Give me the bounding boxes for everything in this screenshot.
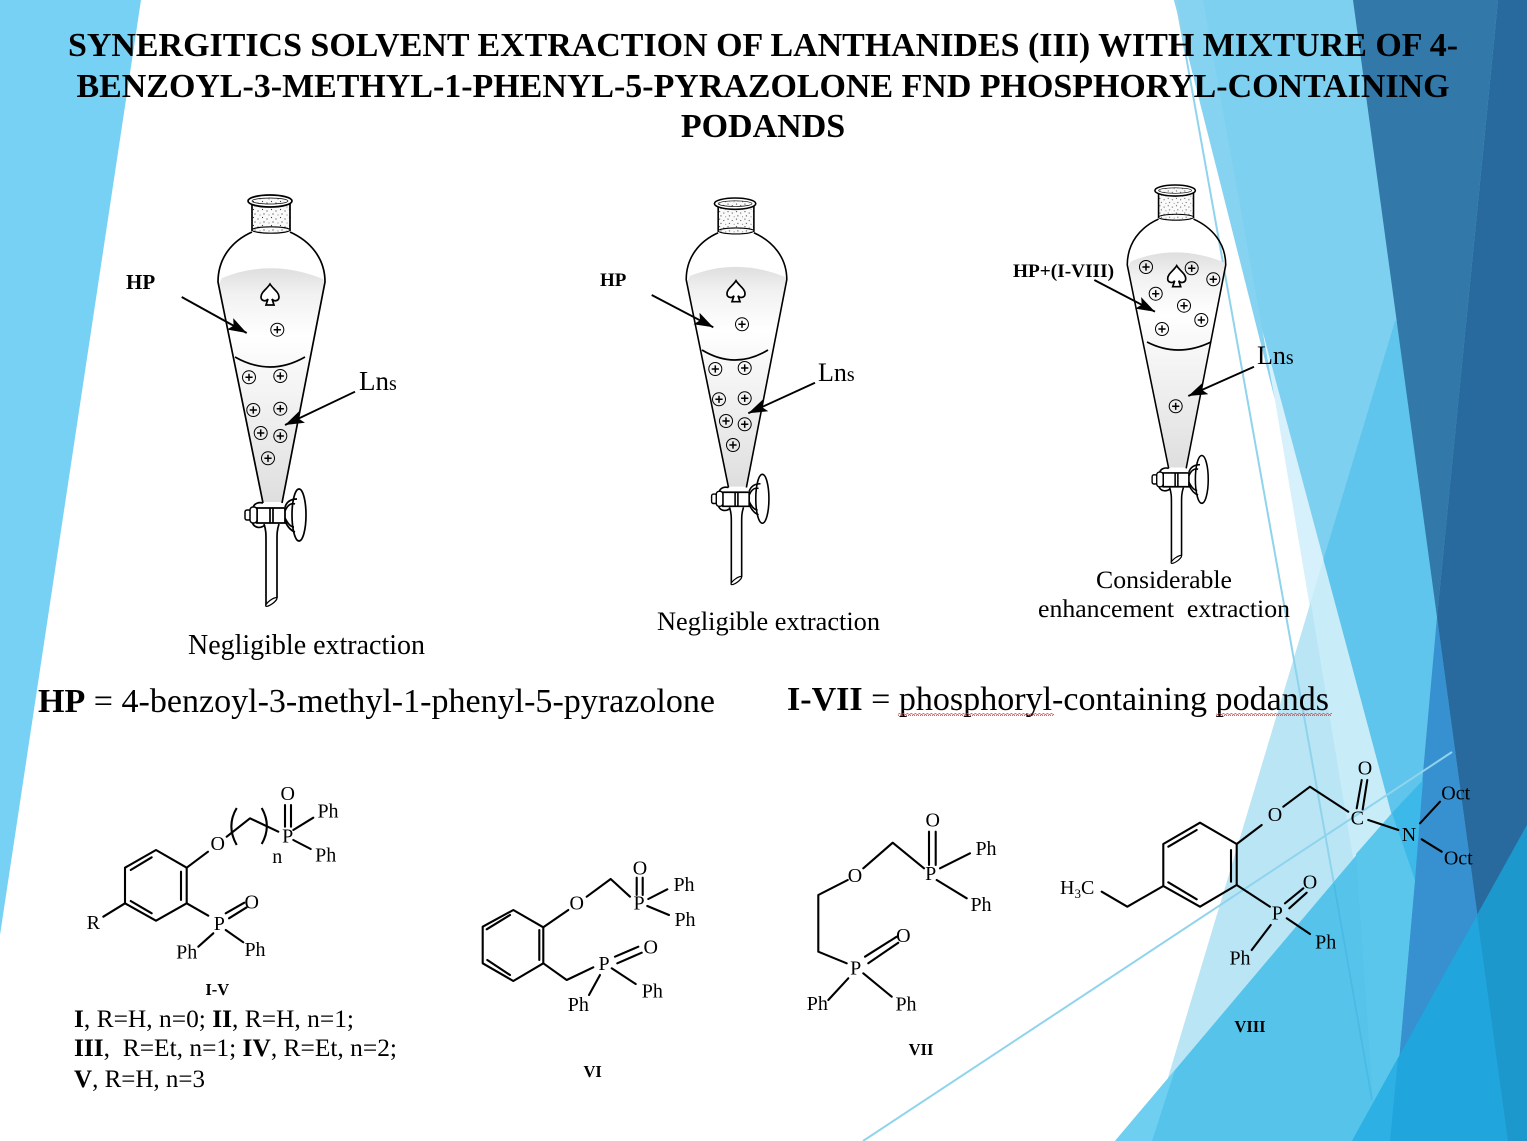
title: SYNERGITICS SOLVENT EXTRACTION OF LANTHANIDES (III) WITH MIXTURE OF 4- (68, 27, 1458, 64)
structure: compound VIII: VIII (1234, 1017, 1266, 1036)
structure: compound VI: O (569, 892, 584, 914)
structure: compound VII: O (848, 865, 862, 887)
structure: compound VIII: C (1081, 877, 1094, 899)
structure: compound VII: O (925, 810, 940, 832)
structure: compound VIII (1060, 757, 1473, 1036)
structure: compound VIII: Oct (1444, 847, 1473, 869)
structure: compound VI (483, 857, 696, 1081)
structure: compound VII: Ph (807, 993, 828, 1015)
structure: compound VI: P (633, 892, 645, 914)
structure: compounds I-V: n (272, 846, 282, 868)
panel: flask 2 (600, 198, 880, 636)
structure: compounds I-V: Ph (315, 845, 336, 867)
structure: compound VII: O (896, 925, 911, 947)
text: compound legend (74, 1006, 397, 1093)
structure: compound VIII: P (1272, 902, 1283, 924)
panel: flask 1: Lns (359, 366, 397, 396)
structure: compounds I-V: I-V (205, 980, 229, 999)
structure: compound VIII: Oct (1441, 782, 1471, 804)
panel: flask 1: Negligible extraction (188, 630, 425, 661)
structure: compound VIII: O (1358, 757, 1372, 779)
structure: compound VIII: N (1402, 824, 1416, 846)
structure: compound VI: Ph (673, 874, 695, 896)
structure: compounds I-V: P (282, 826, 293, 848)
text: compound legend: I, R=H, n=0; II, R=H, n=1; (74, 1006, 354, 1033)
structure: compound VIII: H (1060, 877, 1074, 899)
definition: HP: HP = 4-benzoyl-3-methyl-1-phenyl-5-pyrazolone (38, 683, 715, 720)
structure: compound VI: Ph (642, 981, 663, 1003)
panel: flask 2: Negligible extraction (657, 607, 880, 636)
structure: compound VI: VI (584, 1062, 602, 1081)
text: compound legend: III, R=Et, n=1; IV, R=Et, n=2; (74, 1035, 397, 1062)
panel: flask 2: HP (600, 270, 627, 291)
structure: compound VII: Ph (970, 894, 992, 916)
structure: compound VII: Ph (895, 994, 917, 1016)
structure: compound VII: VII (909, 1040, 933, 1059)
structure: compound VI: O (633, 857, 647, 879)
structure: compounds I-V: R (87, 912, 101, 934)
structure: compound VI: Ph (568, 994, 589, 1016)
structure: compound VIII: O (1268, 804, 1282, 826)
structure: compound VII: Ph (975, 838, 997, 860)
panel: flask 3: enhancement extraction (1038, 594, 1290, 623)
structure: compound VIII: C (1351, 807, 1364, 829)
title: BENZOYL-3-METHYL-1-PHENYL-5-PYRAZOLONE FND PHOSPHORYL-CONTAINING (76, 68, 1450, 105)
panel: flask 3: Considerable (1096, 565, 1232, 594)
structure: compounds I-V (87, 783, 339, 999)
panel: flask 1 (126, 195, 425, 661)
panel: flask 1: HP (126, 270, 155, 294)
definition: podands: I-VII = phosphoryl-containing podands (787, 681, 1329, 718)
panel: flask 3: HP+(I-VIII) (1013, 262, 1114, 282)
text: compound legend: V, R=H, n=3 (74, 1066, 205, 1093)
structure: compounds I-V: P (214, 913, 225, 935)
structure: compound VIII: Ph (1229, 947, 1251, 969)
structure: compound VI: Ph (674, 909, 696, 931)
structure: compound VII (807, 810, 997, 1059)
structure: compounds I-V: O (280, 783, 295, 805)
structure: compounds I-V: Ph (244, 939, 266, 961)
structure: compound VIII: Ph (1315, 931, 1336, 953)
structure: compound VIII: 3 (1074, 886, 1081, 901)
panel: flask 3 (1013, 185, 1294, 623)
structure: compounds I-V: Ph (176, 942, 197, 964)
structure: compound VIII: O (1303, 871, 1317, 893)
structure: compound VII: P (925, 863, 936, 885)
title (68, 27, 1458, 145)
title: PODANDS (681, 108, 845, 145)
panel: flask 3: Lns (1257, 341, 1294, 370)
structure: compounds I-V: Ph (317, 801, 339, 823)
structure: compounds I-V: O (210, 833, 225, 855)
structure: compounds I-V: O (244, 892, 259, 914)
structure: compound VI: O (643, 936, 658, 958)
structure: compound VII: P (850, 957, 861, 979)
structure: compound VI: P (598, 953, 610, 975)
panel: flask 2: Lns (818, 358, 855, 387)
background: right geometric shapes (863, 0, 1527, 1141)
background: left triangle (0, 0, 141, 935)
